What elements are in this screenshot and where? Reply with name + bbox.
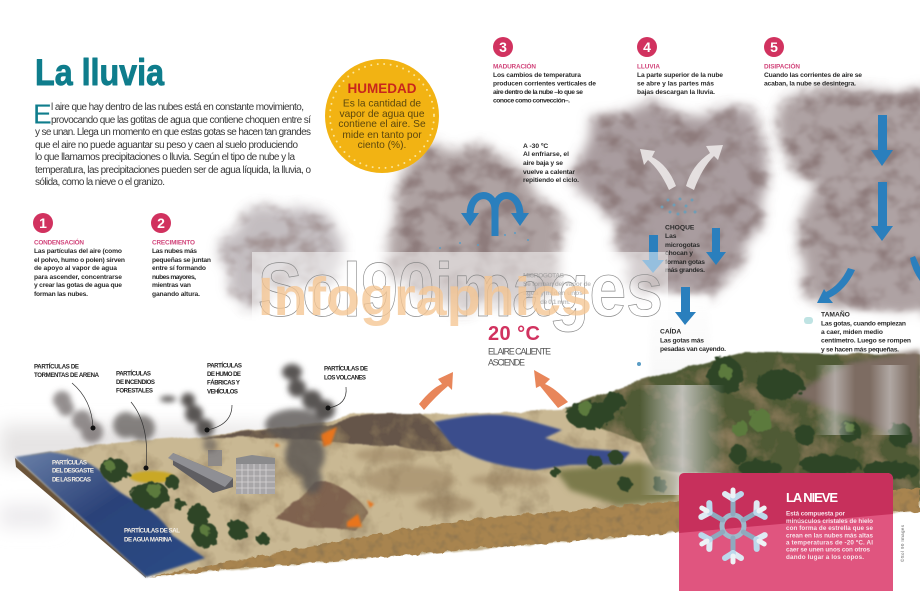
callout: humedad: vapor de agua que [340,109,425,120]
trees [101,357,918,548]
label: rock wear particles: DE LAS ROCAS [52,476,91,484]
label: microgotas [523,272,591,306]
label: factory particles: VEHÍCULOS [207,388,238,396]
hills and volcano [200,414,458,451]
step 2: crecimiento: Las nubes más [152,248,197,255]
callout: humedad: mide en tanto por [342,130,422,141]
step 2: crecimiento [151,213,211,298]
step 5: disipación: Cuando las corrientes de aire se [764,72,862,79]
label: caída: pesadas van cayendo. [660,346,726,353]
step 3: maduración: conoce como convección–. [493,98,570,104]
rain veil [650,295,920,465]
arrows: falling blue [642,115,920,325]
label: caída [660,326,726,353]
eruption cone [275,482,368,530]
label: choque [665,224,705,274]
smoke: volcano [282,364,335,420]
rocky mountain right [790,350,920,448]
droplets under the arrow [439,232,641,366]
step 3: maduración: producen corrientes verticales de [493,80,596,88]
note: a -30 ºC: vuelve a calentar [523,169,575,176]
step 3: maduración: MADURACIÓN [493,62,536,70]
step 5: disipación: acaban, la nube se desintegra. [764,80,856,88]
step 1: condensación: para ascender, concentrarse [34,274,122,281]
step 4: lluvia: se abre y las partes más [637,80,714,88]
step 4: lluvia: LLUVIA [637,64,660,70]
label: rock wear particles: PARTÍCULAS [52,458,87,466]
intro text: provocando que las gotitas de agua que contiene choquen entre sí [51,115,311,126]
smoke: forest fire [113,412,155,441]
step 1: condensación: el polvo, humo o polen) sirven [34,257,125,264]
label: microgotas: de 0,1 mm. [540,299,570,306]
arrows: white split [640,145,723,190]
watermark band [252,248,668,333]
label: caída: Las gotas más [660,338,704,344]
olive meadow near lake [555,462,680,506]
label: factory particles: PARTÍCULAS [207,362,242,370]
note: a -30 ºC: A -30 ºC [523,143,548,150]
step 4: lluvia: bajas descargan la lluvia. [637,89,715,96]
step 1: condensación: de apoyo al vapor de agua [34,265,117,272]
step 3: maduración: 3 [499,39,507,55]
label: tamaño: a caer, miden medio [821,329,883,336]
step 1: condensación: forman las nubes. [34,291,88,298]
watermark: infographics: Infographics [258,267,592,327]
title: La lluvia [35,52,164,93]
panel: la nieve: crean en las nubes más altas [786,532,873,540]
label: factory particles: DE HUMO DE [207,371,241,378]
sand mottling [355,448,550,514]
terrain sand [15,365,920,577]
step 2: crecimiento: CRECIMIENTO [152,240,195,246]
step 1: condensación: CONDENSACIÓN [34,238,84,246]
label: forest fire particles: FORESTALES [116,388,153,394]
label: sand storm particles [34,362,100,379]
step 5: disipación: DISIPACIÓN [764,62,800,70]
panel: la nieve: caer se unen unos con otros [786,546,870,554]
microdroplet cluster [660,198,696,216]
step 3: maduración: aire dentro de la nube –lo que se [493,89,583,96]
arrow: warm air left [419,372,453,410]
callout: humedad: HUMEDAD [348,81,417,96]
label: sea salt particles [124,526,180,544]
leader dots [90,406,330,470]
label: choque: más grandes. [665,267,705,274]
label: rock wear particles [52,458,94,484]
label: choque: chocan y [665,250,693,257]
drop cap: E [33,98,52,130]
factory [168,450,275,494]
cloud: stage 4 rain [579,104,768,296]
watermark: sol90images: Sol90images [258,248,663,333]
step 2: crecimiento: ganando altura. [152,291,200,298]
label: rock wear particles: DEL DESGASTE [52,468,94,474]
step 2: crecimiento: mientras van [152,282,191,289]
intro text: l aire que hay dentro de las nubes está en constante movimiento, [51,102,304,113]
label: microgotas: agua y miden unos [523,290,583,297]
intro text: sólida, como la nieve o el granizo. [35,177,165,188]
lava [275,427,374,527]
step 1: condensación: Las partículas del aire (como [34,248,122,255]
callout: humedad: ciento (%). [358,140,406,151]
label: forest fire particles: PARTÍCULAS [116,370,151,378]
label: factory particles [207,362,242,396]
label: microgotas: MICROGOTAS [523,272,565,280]
note: a -30 ºC [523,143,579,184]
label: temperature: 20 °C [488,323,540,345]
label: caída: CAÍDA [660,326,681,336]
leader lines [72,383,346,468]
label: sand storm particles: PARTÍCULAS DE [34,362,79,370]
label: temperature [488,323,551,368]
note: a -30 ºC: Al enfriarse, el [523,151,569,158]
step 5: disipación: 5 [770,39,778,55]
intro text: temperatura, las precipitaciones pueden ser de agua líquida, la lluvia, o [35,165,311,176]
label: temperature: ASCIENDE [488,358,525,368]
panel: ground shadow [0,425,330,527]
callout: humedad: contiene el aire. Se [338,119,426,130]
lake [434,415,630,470]
label: microgotas: Se forman del vapor de [523,281,591,288]
step 4: lluvia: La parte superior de la nube [637,72,723,79]
panel: la nieve: dando lugar a los copos. [786,554,864,561]
terrain side edge [15,458,146,578]
panel: la nieve: a temperaturas de -20 ºC. Al [786,540,873,546]
arrow: warm air right [534,370,568,408]
step 1: condensación: 1 [39,215,47,231]
step 3: maduración [493,37,596,104]
label: tamaño: Las gotas, cuando empiezan [821,320,906,328]
label: volcano particles: PARTÍCULAS DE [324,364,368,372]
label: temperature: EL AIRE CALIENTE [488,346,551,356]
intro text: y se unan. Llega un momento en que estas gotas se hacen tan grandes [35,127,311,138]
arrow: convection [461,196,529,236]
label: factory particles: FÁBRICAS Y [207,380,240,386]
callout: humedad [325,59,439,173]
smoke: eruption [265,409,325,494]
step 2: crecimiento: entre sí formando [152,265,206,272]
label: tamaño: y se hacen más pequeñas. [821,346,899,354]
forest on right slope [565,352,920,500]
rain veil over forest [640,365,910,495]
credit: ©Sol 90 Images [899,524,905,562]
label: forest fire particles: DE INCENDIOS [116,379,155,386]
smoke: sand storm [53,391,103,443]
smoke plumes [53,364,335,494]
label: choque: CHOQUE [665,224,695,232]
intro text [33,98,311,188]
label: volcano particles [324,364,368,382]
step 2: crecimiento: nubes mayores, [152,274,196,281]
label: tamaño: TAMAÑO [821,310,850,318]
terrain block [15,350,920,578]
label: sea salt particles: PARTÍCULAS DE SAL [124,526,180,534]
label: sea salt particles: DE AGUA MARINA [124,536,173,544]
label: choque: forman gotas [665,259,705,266]
cloud: stage 2 growth [223,208,347,306]
sea [15,452,205,577]
icon: snowflake [698,490,768,562]
panel: la nieve: minúsculos cristales de hielo [786,518,873,525]
note: a -30 ºC: repitiendo el ciclo. [523,177,579,184]
step 4: lluvia: 4 [643,39,651,55]
label: forest fire particles [116,370,155,394]
step 2: crecimiento: pequeñas se juntan [152,257,211,264]
step 1: condensación [33,213,125,298]
gravel strip [146,488,920,577]
fire in forest [130,471,174,483]
label: tamaño [821,310,911,354]
panel: la nieve: Está compuesta por [786,510,846,518]
step 3: maduración: Los cambios de temperatura [493,72,581,79]
icon: droplet size [804,317,813,324]
label: tamaño: centímetro. Luego se rompen [821,338,911,344]
panel: la nieve [679,473,893,591]
step 2: crecimiento: 2 [157,215,165,231]
label: volcano particles: LOS VOLCANES [324,374,366,382]
smoke: factory [160,393,217,452]
label: sand storm particles: TORMENTAS DE ARENA [34,372,100,379]
cloud: stage 3 maturation [390,146,562,305]
panel: la nieve: con forma de estrella que se [786,525,873,532]
callout: humedad: Es la cantidad de [343,98,421,110]
panel: la nieve: LA NIEVE [786,490,838,505]
label: choque: Las [665,233,677,240]
step 1: condensación: y crear las gotas de agua que [34,282,122,289]
note: a -30 ºC: aire baja y se [523,160,563,167]
label: choque: microgotas [665,242,700,249]
step 5: disipación [764,37,862,88]
cloud: stage 5 dissipation [780,85,920,310]
intro text: que el aire no puede aguantar su peso y caen al suelo produciendo [35,140,298,151]
intro text: lo que llamamos precipitaciones o lluvia. Según el tipo de nube y la [35,152,295,163]
step 4: lluvia [637,37,723,96]
